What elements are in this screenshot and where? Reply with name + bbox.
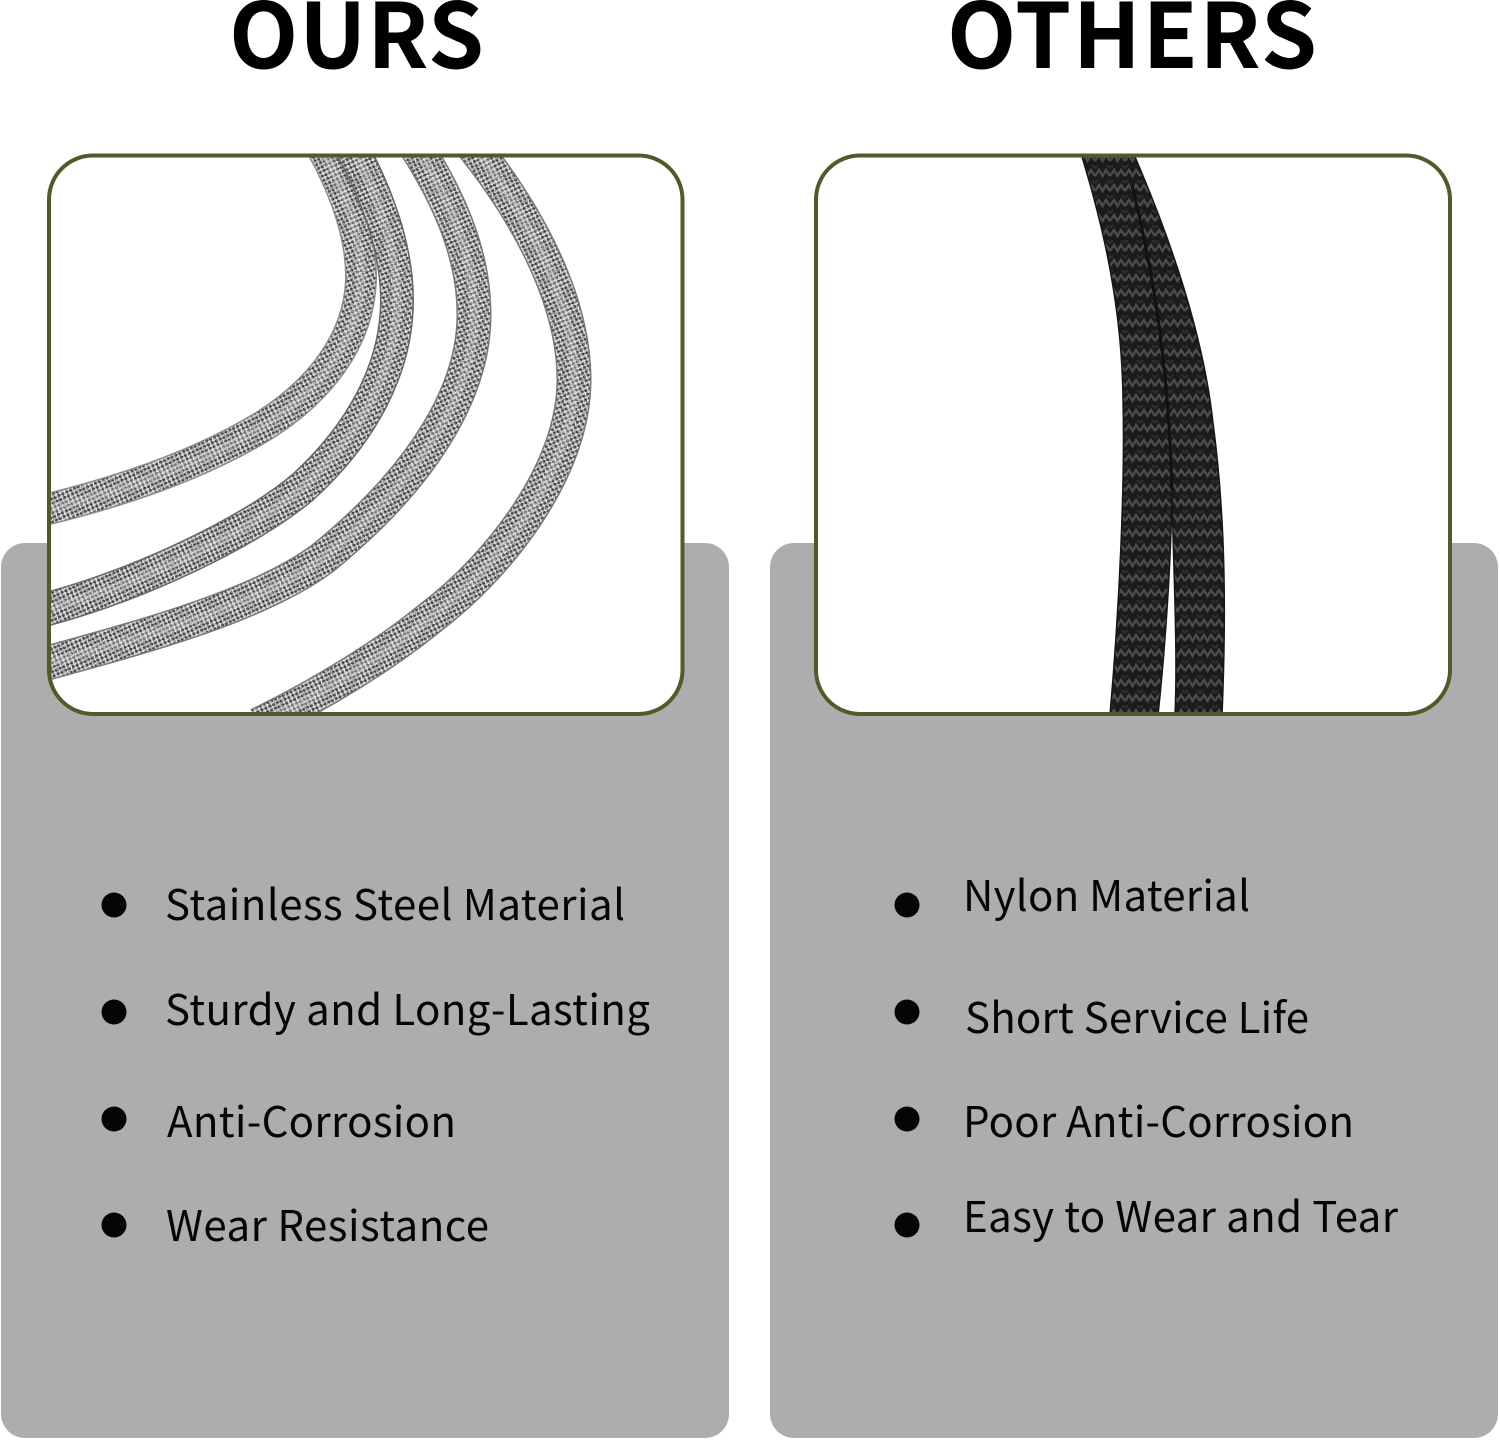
bullet item: Poor Anti-Corrosion: Poor Anti-Corrosion bbox=[963, 1089, 1354, 1150]
bullet item: Sturdy and Long-Lasting: Sturdy and Long-Lasting bbox=[165, 977, 650, 1038]
panel: ours background bbox=[1, 543, 729, 1438]
panel: others background bbox=[770, 543, 1498, 1438]
image card: stainless steel braided hoses bbox=[40, 145, 682, 725]
bullet item: Easy to Wear and Tear: Easy to Wear and Tear bbox=[963, 1184, 1399, 1245]
list: others features bbox=[894, 863, 1399, 1245]
bullet item: Wear Resistance: Wear Resistance bbox=[166, 1193, 489, 1254]
bullet item: Stainless Steel Material: Stainless Steel Material bbox=[165, 872, 625, 933]
bullet item: Anti-Corrosion: Anti-Corrosion bbox=[167, 1089, 456, 1150]
list: ours features bbox=[102, 872, 650, 1254]
image card: black nylon braided cables bbox=[816, 150, 1450, 715]
bullet item: Short Service Life: Short Service Life bbox=[965, 985, 1309, 1046]
bullet item: Nylon Material: Nylon Material bbox=[963, 863, 1250, 924]
